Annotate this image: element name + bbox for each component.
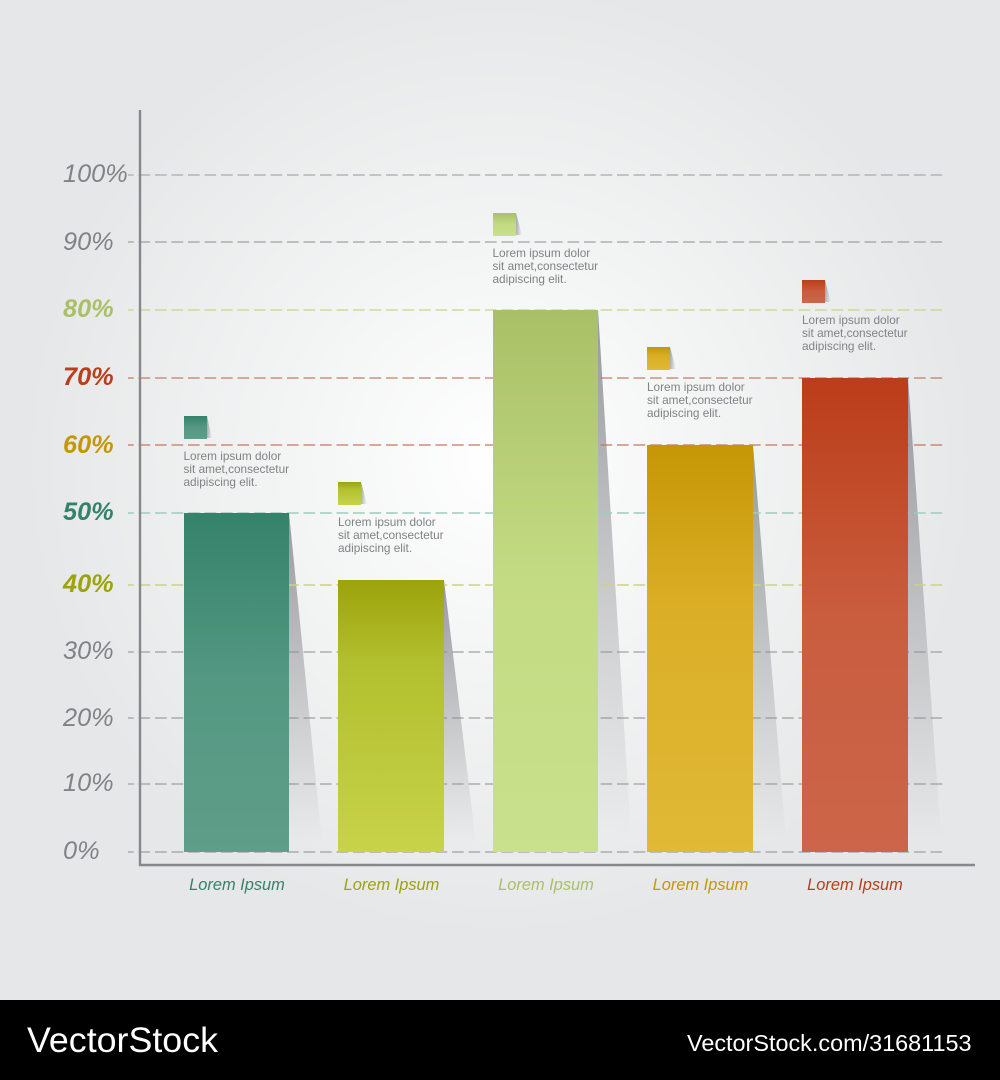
callout 4: adipiscing elit. (647, 406, 721, 420)
bar shadows (289, 310, 942, 852)
bar 3: 80% light green (493, 310, 598, 852)
category labels: Lorem Ipsum (498, 876, 594, 894)
callout 4: sit amet,consectetur (647, 393, 753, 407)
bar 2: 40% olive (338, 580, 444, 852)
callout 4 (647, 347, 753, 420)
y axis labels: 100% (63, 160, 128, 188)
category labels: Lorem Ipsum (807, 876, 903, 894)
callout 2 (338, 482, 444, 555)
y axis labels: 0% (63, 837, 100, 865)
callout 5 (802, 280, 908, 353)
y axis labels: 50% (63, 498, 114, 526)
callout 1 (184, 416, 289, 489)
category labels: Lorem Ipsum (653, 876, 748, 894)
category labels (189, 876, 903, 894)
watermark bar: VectorStock (27, 1021, 219, 1060)
watermark bar (0, 1000, 1000, 1080)
callout 2: sit amet,consectetur (338, 528, 444, 542)
callout 2: adipiscing elit. (338, 541, 412, 555)
bar 4: 60% amber (647, 445, 753, 852)
y axis labels: 10% (63, 769, 114, 797)
y axis labels: 20% (62, 704, 114, 732)
callout 3: Lorem ipsum dolor (492, 246, 590, 260)
grid lines (128, 175, 943, 852)
category labels: Lorem Ipsum (344, 876, 439, 894)
callout 5: sit amet,consectetur (802, 326, 908, 340)
bar 5: 70% red (802, 378, 908, 852)
axes (140, 110, 975, 865)
y axis labels (62, 160, 128, 865)
callout 3 (492, 213, 598, 286)
callout 2: Lorem ipsum dolor (338, 515, 436, 529)
callout 1: Lorem ipsum dolor (184, 449, 281, 463)
bar 1: 50% teal (184, 513, 289, 852)
callout 3: adipiscing elit. (492, 272, 567, 286)
y axis labels: 30% (63, 637, 114, 665)
callout 1: adipiscing elit. (184, 475, 258, 489)
category labels: Lorem Ipsum (189, 876, 285, 894)
callout 3: sit amet,consectetur (492, 259, 598, 273)
callout 5: adipiscing elit. (802, 339, 876, 353)
watermark bar: VectorStock.com/31681153 (687, 1030, 972, 1056)
callout 1: sit amet,consectetur (184, 462, 289, 476)
y axis labels: 80% (63, 295, 114, 323)
callout 5: Lorem ipsum dolor (802, 313, 900, 327)
y axis labels: 70% (63, 363, 114, 391)
y axis labels: 90% (63, 228, 114, 256)
y axis labels: 40% (62, 570, 114, 598)
callout 4: Lorem ipsum dolor (647, 380, 745, 394)
y axis labels: 60% (63, 431, 114, 459)
